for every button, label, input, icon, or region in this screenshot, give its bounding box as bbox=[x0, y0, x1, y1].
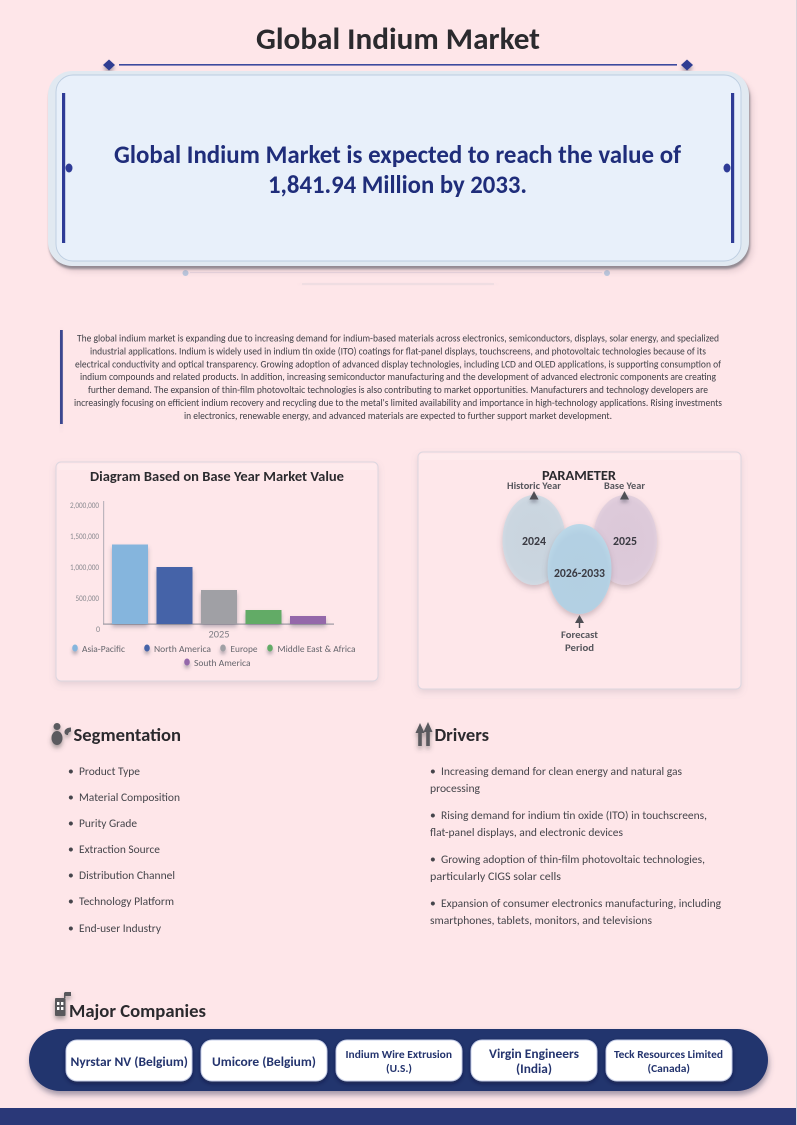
banner accent right bbox=[724, 93, 734, 243]
ellipse: forecast period bbox=[548, 524, 612, 614]
list: segmentation: • bbox=[68, 817, 74, 831]
y axis labels bbox=[70, 501, 100, 635]
list: drivers: processing bbox=[430, 782, 481, 796]
list: segmentation: Material Composition bbox=[79, 791, 180, 805]
y axis labels: 500,000 bbox=[76, 594, 99, 604]
heading: segmentation: Segmentation bbox=[74, 724, 181, 746]
list: segmentation: • bbox=[68, 791, 74, 805]
list: drivers: • bbox=[430, 897, 436, 911]
company: Nyrstar: Nyrstar NV (Belgium) bbox=[70, 1053, 188, 1070]
icon: people bbox=[52, 723, 71, 745]
footer bar bbox=[0, 1108, 796, 1125]
heading: major companies bbox=[55, 992, 206, 1022]
list: segmentation: • bbox=[68, 895, 74, 909]
parameter title: PARAMETER bbox=[542, 466, 617, 484]
description text block: increasingly focusing on efficient indium recovery and recycling due to the metal's limited availability and importance in high-technology applications. Rising investments bbox=[74, 396, 722, 409]
legend: North America bbox=[154, 643, 211, 655]
label: forecast period: Period bbox=[565, 641, 594, 654]
banner headline bbox=[114, 139, 681, 200]
list: segmentation: • bbox=[68, 922, 74, 936]
banner headline: Global Indium Market is expected to reach the value of bbox=[114, 139, 681, 170]
description text block: indium compounds and related products. In addition, increasing semiconductor manufacturing and the development of advanced electronic components are creating bbox=[80, 370, 716, 383]
legend: Middle East & Africa bbox=[278, 643, 356, 655]
list: segmentation: Distribution Channel bbox=[79, 869, 175, 883]
description text block: electrical conductivity and optical transparency. Growing adoption of advanced display technologies, including LCD and OLED applications, is supporting consumption of bbox=[75, 358, 722, 370]
company: Indium Wire Extrusion: (U.S.) bbox=[386, 1062, 412, 1075]
y axis labels: 1,000,000 bbox=[70, 563, 99, 573]
list: segmentation: • bbox=[68, 869, 74, 883]
y axis labels: 2,000,000 bbox=[70, 501, 99, 511]
panel: companies strip bbox=[29, 1029, 768, 1091]
bottom ornament under banner bbox=[182, 270, 610, 285]
company: Umicore bbox=[201, 1040, 327, 1081]
company: Teck Resources: Teck Resources Limited bbox=[614, 1048, 723, 1061]
list: segmentation: Product Type bbox=[79, 765, 140, 779]
y axis labels: 1,500,000 bbox=[70, 532, 99, 542]
label: base year bbox=[604, 479, 645, 500]
ellipse: base year: 2025 bbox=[613, 535, 637, 549]
company: Virgin Engineers: Virgin Engineers bbox=[489, 1047, 579, 1062]
label: historic year: Historic Year bbox=[507, 479, 561, 492]
heading: major companies: Major Companies bbox=[69, 1000, 206, 1022]
icon: up arrows bbox=[416, 722, 432, 746]
icon: building bbox=[55, 992, 71, 1016]
legend bbox=[72, 643, 355, 669]
list: drivers: • bbox=[430, 853, 436, 867]
top ornament line with diamonds bbox=[103, 60, 693, 70]
panel: parameter diagram bbox=[418, 452, 741, 689]
ellipse: forecast period: 2026-2033 bbox=[554, 567, 605, 581]
y axis labels: 0 bbox=[96, 625, 100, 635]
company: Teck Resources: (Canada) bbox=[648, 1062, 690, 1075]
chart title: Diagram Based on Base Year Market Value bbox=[90, 467, 344, 485]
axes bbox=[103, 501, 334, 625]
label: base year: Base Year bbox=[604, 479, 645, 492]
panel: bar chart bbox=[56, 462, 378, 681]
heading: drivers: Drivers bbox=[434, 724, 489, 746]
ellipse: historic year: 2024 bbox=[522, 535, 546, 549]
banner accent left bbox=[62, 93, 72, 243]
banner headline: 1,841.94 Million by 2033. bbox=[268, 169, 527, 200]
legend: Europe bbox=[230, 643, 258, 655]
list: segmentation: • bbox=[68, 765, 74, 779]
description text block bbox=[60, 330, 722, 424]
label: forecast period bbox=[561, 615, 598, 654]
list: drivers bbox=[430, 765, 722, 928]
ellipse: base year bbox=[593, 495, 657, 585]
list: segmentation: Technology Platform bbox=[79, 895, 174, 909]
company: Indium Wire Extrusion: Indium Wire Extrusion bbox=[346, 1048, 452, 1061]
x axis label: 2025 bbox=[208, 628, 230, 640]
company: Indium Wire Extrusion bbox=[336, 1040, 462, 1081]
bars bbox=[112, 544, 326, 624]
list: drivers: Increasing demand for clean energy and natural gas bbox=[441, 765, 682, 779]
description text block: industrial applications. Indium is widely used in indium tin oxide (ITO) coatings for flat-panel displays, touchscreens, and photovoltaic technologies because of its bbox=[90, 344, 706, 358]
description text block: The global indium market is expanding due to increasing demand for indium-based materials across electronics, semiconductors, displays, solar energy, and specialized bbox=[77, 332, 719, 344]
company: Virgin Engineers bbox=[471, 1040, 597, 1081]
description text block: further demand. The expansion of thin-film photovoltaic technologies is also contributing to market opportunities. Manufacturers and technology developers are bbox=[88, 383, 708, 396]
legend: South America bbox=[194, 657, 250, 669]
list: segmentation: End-user Industry bbox=[79, 922, 162, 936]
list: drivers: • bbox=[430, 809, 436, 823]
list: drivers: Expansion of consumer electronics manufacturing, including bbox=[441, 897, 722, 911]
company: Umicore: Umicore (Belgium) bbox=[212, 1053, 316, 1070]
list: drivers: Growing adoption of thin-film photovoltaic technologies, bbox=[441, 853, 705, 867]
list: drivers: • bbox=[430, 765, 436, 779]
title: Global Indium Market bbox=[256, 21, 540, 58]
list: segmentation bbox=[68, 765, 180, 936]
label: forecast period: Forecast bbox=[561, 628, 598, 641]
list: segmentation: • bbox=[68, 843, 74, 857]
company: Nyrstar bbox=[66, 1040, 192, 1081]
company: Teck Resources bbox=[606, 1040, 732, 1081]
heading: drivers bbox=[416, 722, 489, 746]
list: drivers: flat-panel displays, and electronic devices bbox=[430, 826, 623, 840]
legend: Asia-Pacific bbox=[82, 643, 125, 655]
list: drivers: particularly CIGS solar cells bbox=[430, 870, 562, 884]
list: drivers: smartphones, tablets, monitors, and televisions bbox=[430, 914, 652, 928]
list: segmentation: Purity Grade bbox=[79, 817, 137, 831]
description text block: in electronics, renewable energy, and advanced materials are expected to further support market development. bbox=[184, 409, 612, 422]
list: segmentation: Extraction Source bbox=[79, 843, 160, 857]
company: Virgin Engineers: (India) bbox=[516, 1062, 552, 1077]
list: drivers: Rising demand for indium tin oxide (ITO) in touchscreens, bbox=[441, 809, 707, 823]
ellipse: historic year bbox=[502, 495, 566, 585]
label: historic year bbox=[507, 479, 561, 500]
panel: market value banner bbox=[48, 71, 753, 272]
